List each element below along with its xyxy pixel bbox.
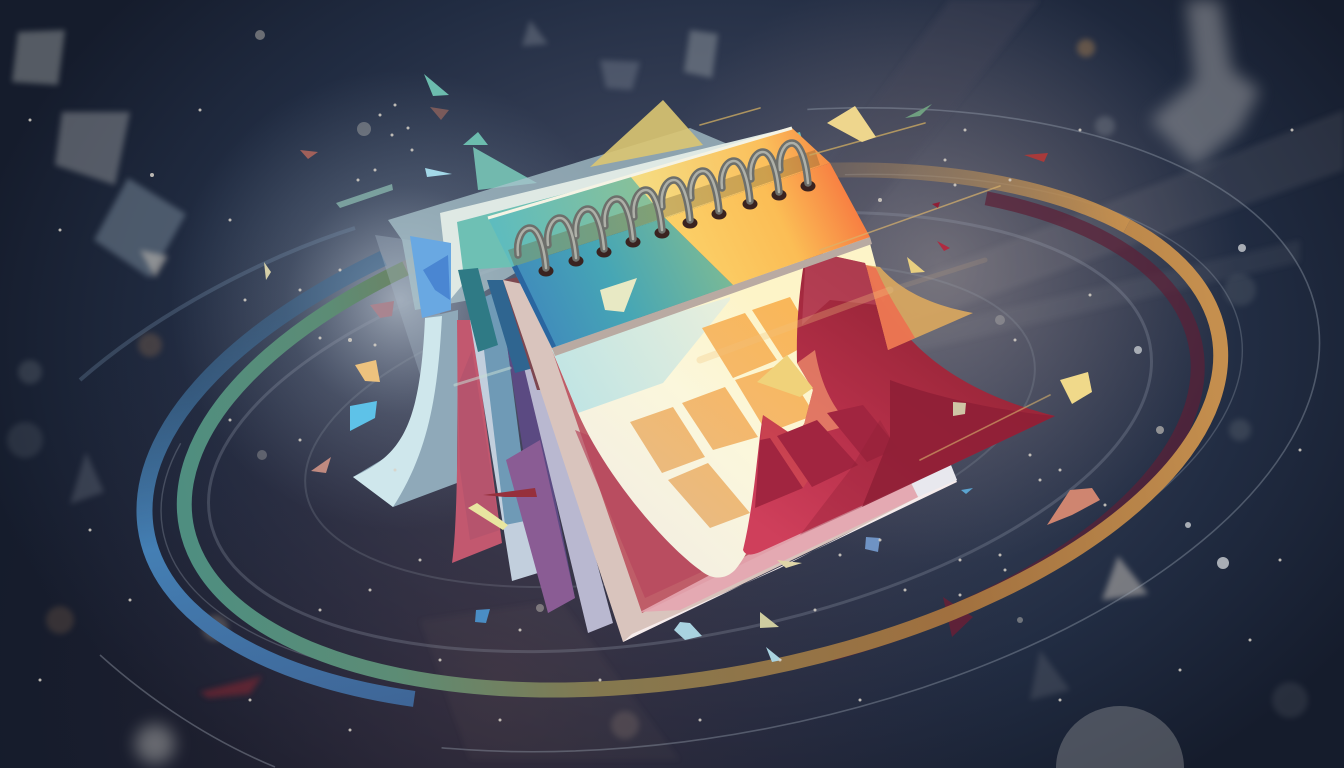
spiral binding (518, 143, 816, 276)
calendar grid cells (630, 297, 815, 528)
red grid cells (755, 405, 898, 508)
gold sail (866, 265, 973, 350)
orbit nodes (1134, 244, 1246, 569)
curled white page (552, 236, 885, 578)
back sheets: top layers (375, 100, 805, 390)
back sheets: hanging strips (353, 268, 613, 633)
calendar front cover (512, 163, 872, 356)
confetti shards (264, 74, 1100, 662)
calendar back band (488, 128, 830, 268)
ring: green to gold (141, 92, 1264, 767)
base sheet (503, 280, 957, 642)
ring: wine shadow (754, 166, 1239, 654)
streak lines over calendar (455, 108, 1050, 460)
red overlay: dark wedge (800, 380, 1055, 535)
calendar (353, 100, 1055, 642)
ring: blue arc (105, 258, 463, 741)
light rays (420, 0, 1344, 760)
red overlay (743, 250, 1055, 555)
